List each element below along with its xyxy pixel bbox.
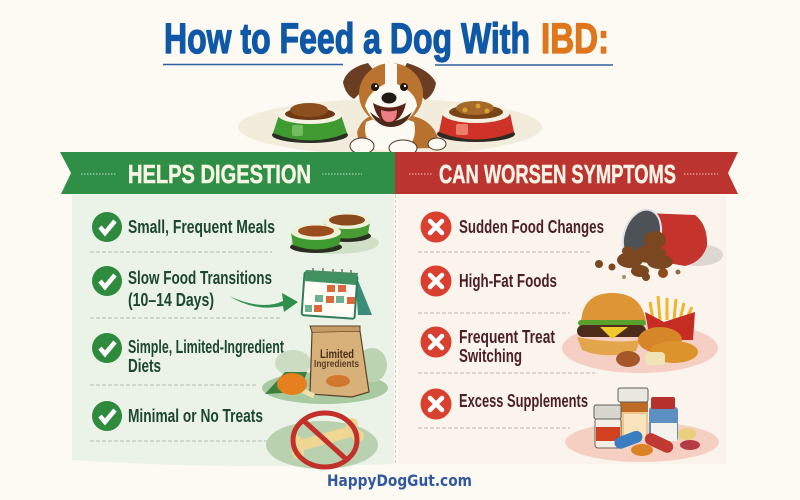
- item: slow food transitions: [92, 266, 272, 310]
- icon: calendar: [302, 268, 372, 319]
- item: limited ingredient diets: Simple, Limited-Ingredient: [128, 337, 284, 357]
- icon: burger, fries and chicken: [562, 293, 718, 373]
- item: small frequent meals: [92, 212, 275, 242]
- item: small frequent meals: Small, Frequent Meals: [128, 217, 275, 237]
- banner: helps digestion: [60, 152, 395, 194]
- icon: red bowl: [437, 101, 515, 142]
- footer brand: HappyDogGut.com: [327, 471, 472, 490]
- item: slow food transitions: (10–14 Days): [128, 290, 214, 310]
- title underline: [163, 64, 613, 66]
- icon: two green bowls: [290, 213, 379, 254]
- banner: helps digestion: HELPS DIGESTION: [128, 159, 311, 189]
- title: IBD:: [541, 15, 609, 63]
- item: excess supplements: [420, 388, 588, 420]
- icon: no bones: [266, 413, 378, 469]
- panel: helps digestion background: [72, 195, 394, 466]
- item: slow food transitions: Slow Food Transitions: [128, 268, 272, 288]
- item: high fat foods: [420, 266, 557, 296]
- item: limited ingredient diets: Diets: [128, 356, 161, 376]
- item: high fat foods: High-Fat Foods: [459, 271, 557, 291]
- icon: limited ingredients bag: Ingredients: [314, 359, 359, 370]
- icon: green bowl: [272, 103, 348, 143]
- dog and bowls illustration: [238, 63, 542, 156]
- icon: puppy: [343, 63, 446, 156]
- item: excess supplements: Excess Supplements: [459, 391, 588, 411]
- icon: supplement bottles and pills: [565, 388, 719, 462]
- item: minimal treats: [92, 401, 263, 431]
- item: sudden food changes: [420, 212, 604, 242]
- list: helps digestion: [92, 212, 284, 431]
- item: frequent treat switching: Switching: [459, 346, 522, 366]
- backdrop ellipse: [238, 99, 542, 155]
- center divider: [394, 195, 396, 465]
- item: sudden food changes: Sudden Food Changes: [459, 217, 604, 237]
- item: frequent treat switching: Frequent Treat: [459, 327, 555, 347]
- title: How to Feed a Dog With: [164, 15, 530, 63]
- icon: limited ingredients bag: Limited: [320, 347, 354, 361]
- item: minimal treats: Minimal or No Treats: [128, 406, 263, 426]
- list: can worsen symptoms: [420, 212, 604, 420]
- icon: spilled food bowl: [595, 205, 723, 281]
- banner: can worsen symptoms: [395, 152, 738, 194]
- item: limited ingredient diets: [92, 333, 284, 376]
- arrow: to calendar: [229, 293, 298, 312]
- icon: limited ingredients bag: [262, 326, 388, 404]
- panel: can worsen symptoms background: [398, 195, 726, 464]
- item: frequent treat switching: [420, 326, 555, 366]
- banner: can worsen symptoms: CAN WORSEN SYMPTOMS: [439, 159, 676, 189]
